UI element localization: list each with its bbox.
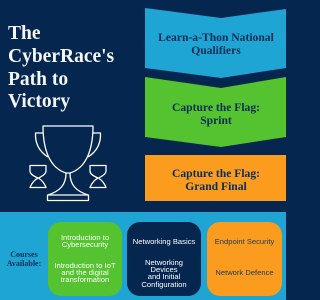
title: CyberRace's bbox=[8, 46, 114, 67]
panel: Grand Final stage bbox=[145, 155, 286, 201]
card: orange courses: Endpoint Security bbox=[215, 237, 274, 246]
card: green courses: and the digital bbox=[61, 268, 109, 277]
heading: Capture the Flag: Grand Final: Grand Final bbox=[185, 180, 247, 193]
heading: Capture the Flag: Grand Final: Capture the Flag: bbox=[172, 167, 260, 180]
card: navy courses bbox=[127, 222, 201, 296]
card: navy courses: Networking bbox=[145, 258, 183, 267]
label: Courses Available bbox=[6, 250, 41, 268]
card: navy courses: and Initial bbox=[148, 272, 180, 281]
heading: Capture the Flag: Grand Final bbox=[172, 167, 260, 193]
title: The bbox=[8, 23, 41, 44]
panel: courses band bbox=[0, 212, 286, 300]
card: green courses: Cybersecurity bbox=[62, 240, 108, 249]
card: orange courses bbox=[207, 222, 282, 296]
card: green courses bbox=[48, 222, 122, 296]
title: Path to bbox=[8, 69, 68, 90]
card: navy courses: Networking Basics bbox=[133, 237, 195, 246]
heading: Learn-a-Thon National Qualifiers bbox=[158, 31, 274, 57]
heading: Capture the Flag: Sprint: Sprint bbox=[200, 114, 232, 127]
card: green courses: Introduction to bbox=[61, 233, 109, 242]
title: Victory bbox=[8, 91, 70, 112]
label: Courses Available: Courses bbox=[10, 250, 38, 259]
heading: Learn-a-Thon National Qualifiers: Qualifiers bbox=[191, 44, 241, 57]
card: orange courses: Network Defence bbox=[215, 268, 274, 277]
heading: Capture the Flag: Sprint: Capture the Flag: bbox=[172, 101, 260, 114]
card: green courses: transformation bbox=[61, 275, 109, 284]
heading: Capture the Flag: Sprint bbox=[172, 101, 260, 127]
title bbox=[8, 23, 114, 112]
card: navy courses: Configuration bbox=[141, 280, 187, 289]
heading: Learn-a-Thon National Qualifiers: Learn-a-Thon National bbox=[158, 31, 274, 44]
label: Courses Available: Available: bbox=[7, 258, 41, 268]
card: green courses: Introduction to IoT bbox=[54, 261, 116, 270]
card: navy courses: Devices bbox=[150, 265, 178, 274]
